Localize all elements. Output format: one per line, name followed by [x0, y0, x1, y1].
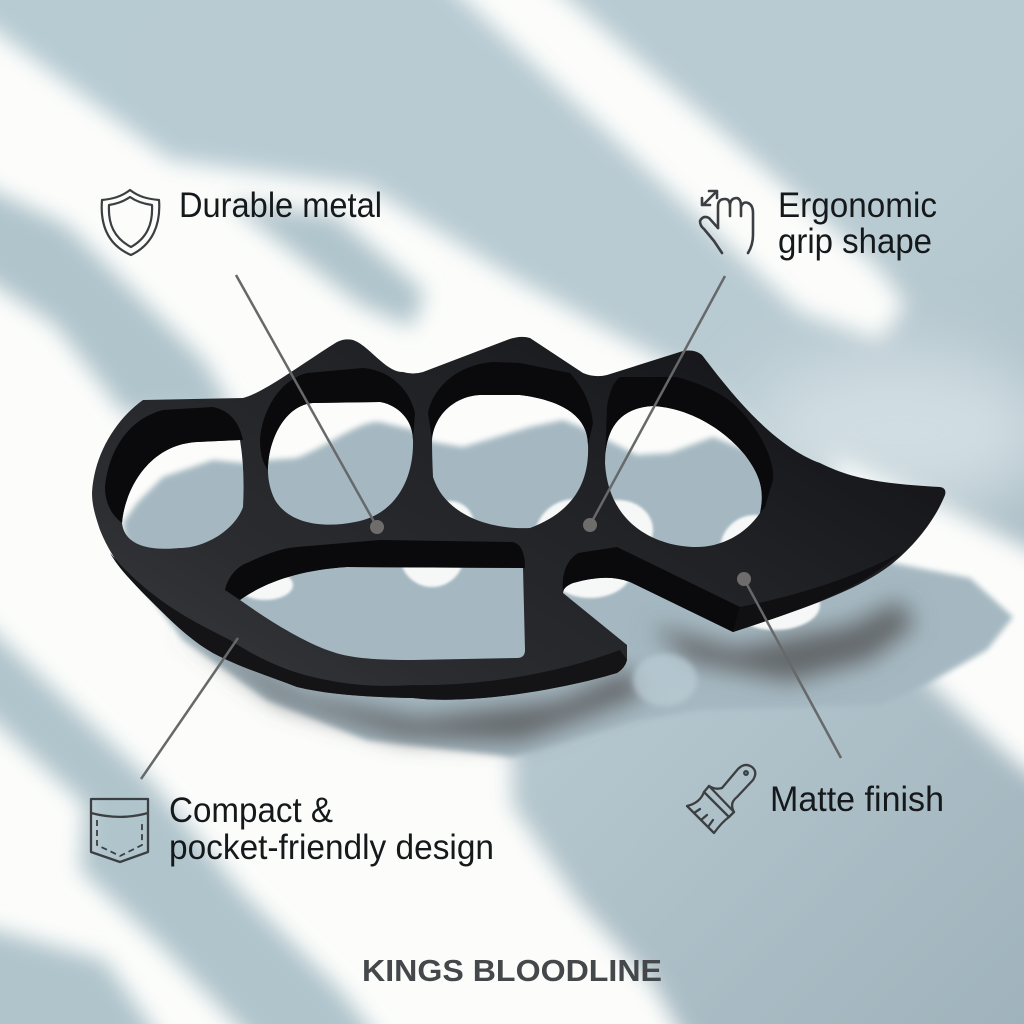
leader dot	[583, 518, 597, 532]
leader dot	[370, 520, 384, 534]
icon: pocket	[91, 799, 148, 862]
knuckle object	[92, 337, 945, 700]
label: Durable metal	[179, 186, 382, 225]
callout: compact pocket: pocket-friendly design	[169, 828, 494, 867]
metal body with finger holes	[92, 337, 945, 700]
callout: ergonomic grip	[583, 186, 937, 532]
cast shadow of the object	[123, 420, 1013, 757]
callout: ergonomic grip: grip shape	[778, 222, 932, 261]
leader line	[236, 275, 377, 527]
inner hole walls	[105, 362, 773, 632]
leader line	[744, 579, 841, 758]
blade rim edge	[733, 553, 900, 632]
label: Ergonomic	[778, 186, 937, 225]
bottom rim edge	[110, 553, 627, 700]
callout: matte finish	[687, 572, 944, 833]
leader dot	[737, 572, 751, 586]
callout: compact pocket	[91, 638, 494, 867]
icon: paint brush	[687, 765, 755, 833]
icon: shield	[102, 190, 159, 255]
icon: hand with arrows	[700, 191, 753, 253]
label: Matte finish	[770, 780, 944, 819]
leader line	[590, 276, 725, 525]
leader line	[141, 638, 238, 779]
label: Compact &	[169, 791, 333, 830]
light spots through the shadow	[237, 499, 820, 630]
brand name: KINGS BLOODLINE	[362, 953, 662, 988]
callout: durable metal	[102, 186, 384, 534]
